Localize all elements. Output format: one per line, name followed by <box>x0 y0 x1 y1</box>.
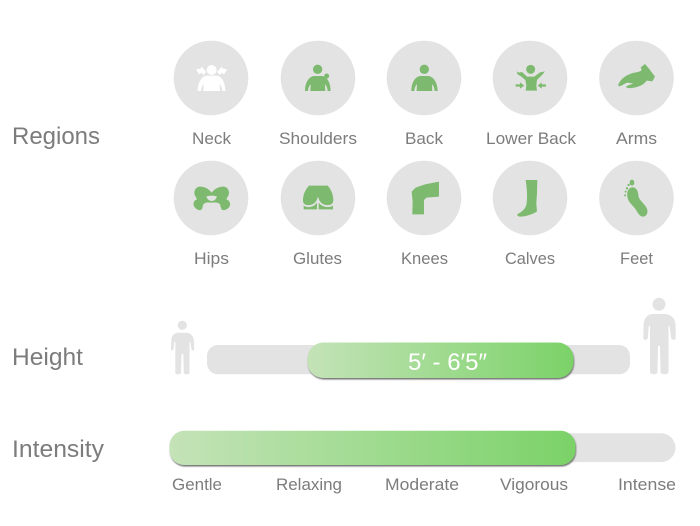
icon: tall person <box>643 298 676 374</box>
label: Glutes: Glutes <box>293 249 342 268</box>
label: Back: Back <box>405 129 443 148</box>
icon: lower back <box>493 41 567 115</box>
icon: neck <box>174 41 248 115</box>
heading: Height: Height <box>12 344 83 371</box>
label: Knees: Knees <box>401 249 448 268</box>
label: Relaxing: Relaxing <box>276 475 342 494</box>
intensity track <box>400 433 676 462</box>
label: Vigorous: Vigorous <box>500 475 568 494</box>
heading: Regions: Regions <box>12 123 100 150</box>
label: Feet: Feet <box>620 249 653 268</box>
panel: height <box>12 298 676 378</box>
icon: knees <box>387 161 461 235</box>
panel: intensity <box>12 431 676 494</box>
label: Hips: Hips <box>194 249 229 268</box>
icon: short person <box>171 321 194 374</box>
height track <box>207 345 630 374</box>
icon: hips <box>174 161 248 235</box>
label: Gentle: Gentle <box>172 475 222 494</box>
icon: glutes <box>281 161 355 235</box>
icon: back <box>387 41 461 115</box>
icon: calves <box>493 161 567 235</box>
intensity bar <box>170 431 576 465</box>
label: Moderate: Moderate <box>385 475 459 494</box>
label: Lower Back: Lower Back <box>486 129 576 148</box>
icon: shoulders <box>281 41 355 115</box>
panel: regions <box>12 41 674 268</box>
label: Calves: Calves <box>505 249 555 268</box>
height range bar <box>308 342 574 378</box>
icon: arms <box>599 41 674 115</box>
height range value: 5′ - 6′5″ <box>408 349 487 376</box>
label: Intense: Intense <box>618 475 676 494</box>
icon: feet <box>599 161 674 235</box>
label: Shoulders: Shoulders <box>279 129 357 148</box>
heading: Intensity: Intensity <box>12 436 104 463</box>
label: Arms: Arms <box>616 129 657 148</box>
label: Neck: Neck <box>192 129 232 148</box>
